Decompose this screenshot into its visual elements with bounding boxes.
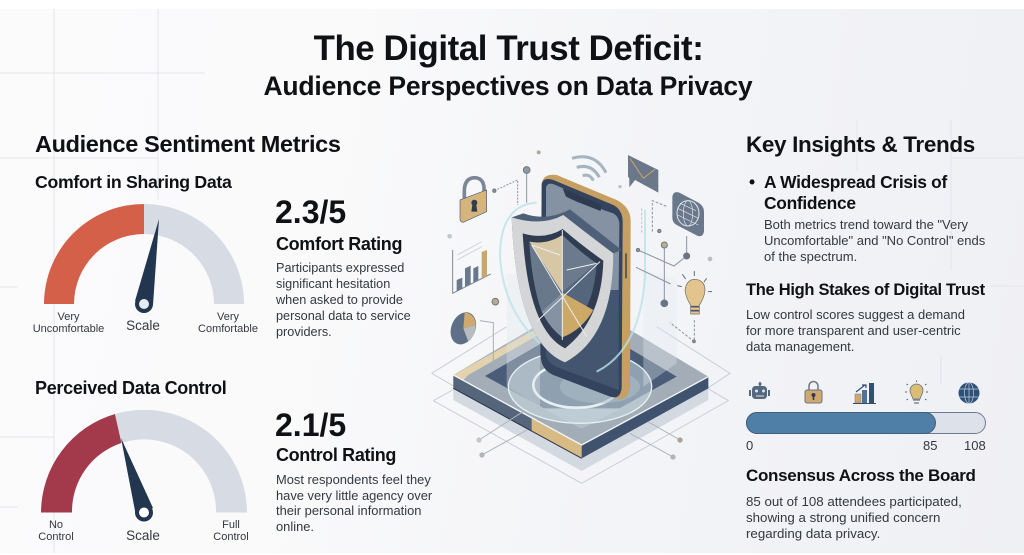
text: consensus description: showing a strong unified concern (746, 510, 940, 525)
shield (512, 209, 622, 362)
text: high stakes description: data management. (746, 339, 854, 354)
icon: wifi signal (572, 157, 606, 181)
text: crisis description: Both metrics trend toward the "Very (764, 217, 968, 232)
icon: pie chart (446, 308, 481, 348)
title: The Digital Trust Deficit: (314, 29, 703, 68)
gauge label: no control: No (49, 519, 63, 531)
bar axis label: 0: 0 (746, 438, 753, 453)
text: consensus description (746, 494, 962, 541)
row icon: growth chart (853, 383, 876, 404)
insight heading: high stakes: The High Stakes of Digital Trust (746, 281, 985, 299)
text: comfort description: Participants expressed (276, 261, 404, 275)
gauge label: full control (213, 519, 249, 543)
metric value: comfort: 2.3/5 (275, 194, 346, 230)
insight heading: consensus: Consensus Across the Board (746, 466, 976, 485)
text: control description: Most respondents feel they (276, 472, 431, 487)
text: crisis description: of the spectrum. (764, 249, 857, 264)
text: crisis description: Uncomfortable" and "No Control" ends (764, 233, 985, 248)
central illustration: phone and shield on a platform (432, 150, 730, 483)
connector nodes (447, 150, 712, 460)
row icon: padlock (805, 382, 822, 403)
metric label: comfort rating: Comfort Rating (276, 234, 402, 254)
text: high stakes description (746, 307, 965, 354)
icon: envelope bubble (628, 155, 658, 193)
text: high stakes description: for more transparent and user-centric (746, 323, 961, 338)
row icon: robot (750, 382, 769, 399)
gauge label: very comfortable (198, 311, 258, 335)
heading: key insights and trends: Key Insights & Trends (746, 132, 975, 157)
gauge: comfort in sharing data (44, 204, 244, 311)
bar axis label: 85: 85 (923, 438, 937, 453)
text: crisis description (764, 217, 985, 264)
text: comfort description: when asked to provide (276, 293, 403, 307)
glow panels (507, 270, 677, 407)
text: control description: online. (276, 518, 314, 534)
metric label: control rating: Control Rating (276, 445, 396, 465)
row icon: light bulb (905, 380, 928, 403)
insight heading: crisis of confidence: • (749, 172, 755, 192)
gauge label: very uncomfortable: Uncomfortable (33, 323, 104, 335)
text: comfort description: personal data to service (276, 309, 411, 323)
insight heading: crisis of confidence: A Widespread Crisis of (764, 172, 947, 192)
insight heading: crisis of confidence (749, 172, 948, 213)
row icon: globe (958, 382, 980, 404)
gauge label: full control: Full (222, 519, 240, 531)
gauge label: very uncomfortable (33, 311, 104, 335)
energy swoosh (500, 203, 645, 372)
text: control description: have very little agency over (276, 488, 432, 502)
icon: padlock (460, 178, 487, 222)
icon: globe tile (672, 192, 704, 236)
gauge label: full control: Control (213, 531, 249, 543)
gauge label: scale: Scale (126, 318, 160, 333)
subtitle: Audience Perspectives on Data Privacy (264, 71, 752, 101)
bar axis label: 108: 108 (964, 438, 986, 453)
circuit connectors (480, 170, 694, 362)
platform (432, 300, 730, 483)
heading: audience sentiment metrics: Audience Sentiment Metrics (35, 131, 341, 157)
text: high stakes description: Low control scores suggest a demand (746, 307, 965, 322)
insight heading: crisis of confidence: Confidence (764, 193, 856, 213)
text: comfort description: providers. (276, 325, 332, 339)
text: comfort description (276, 261, 411, 339)
gauge label: no control (38, 519, 74, 543)
metric value: control: 2.1/5 (275, 407, 346, 443)
gauge label: very uncomfortable: Very (57, 311, 80, 323)
text: comfort description: significant hesitation (276, 277, 390, 291)
gauge label: very comfortable: Comfortable (198, 323, 258, 335)
heading: comfort in sharing data: Comfort in Sharing Data (35, 172, 232, 192)
gauge label: very comfortable: Very (217, 311, 239, 323)
heading: perceived data control: Perceived Data Control (35, 378, 226, 398)
text: control description (276, 472, 432, 534)
gauge label: scale: Scale (126, 528, 160, 543)
participation bar (746, 412, 986, 434)
text: consensus description: regarding data privacy. (746, 526, 880, 541)
gauge: perceived data control (41, 410, 247, 520)
icon: light bulb (677, 271, 712, 314)
icon: bar chart (453, 242, 491, 293)
text: consensus description: 85 out of 108 attendees participated, (746, 494, 962, 509)
smartphone (541, 175, 631, 399)
gauge label: no control: Control (38, 531, 74, 543)
text: control description: their personal information (276, 503, 421, 518)
